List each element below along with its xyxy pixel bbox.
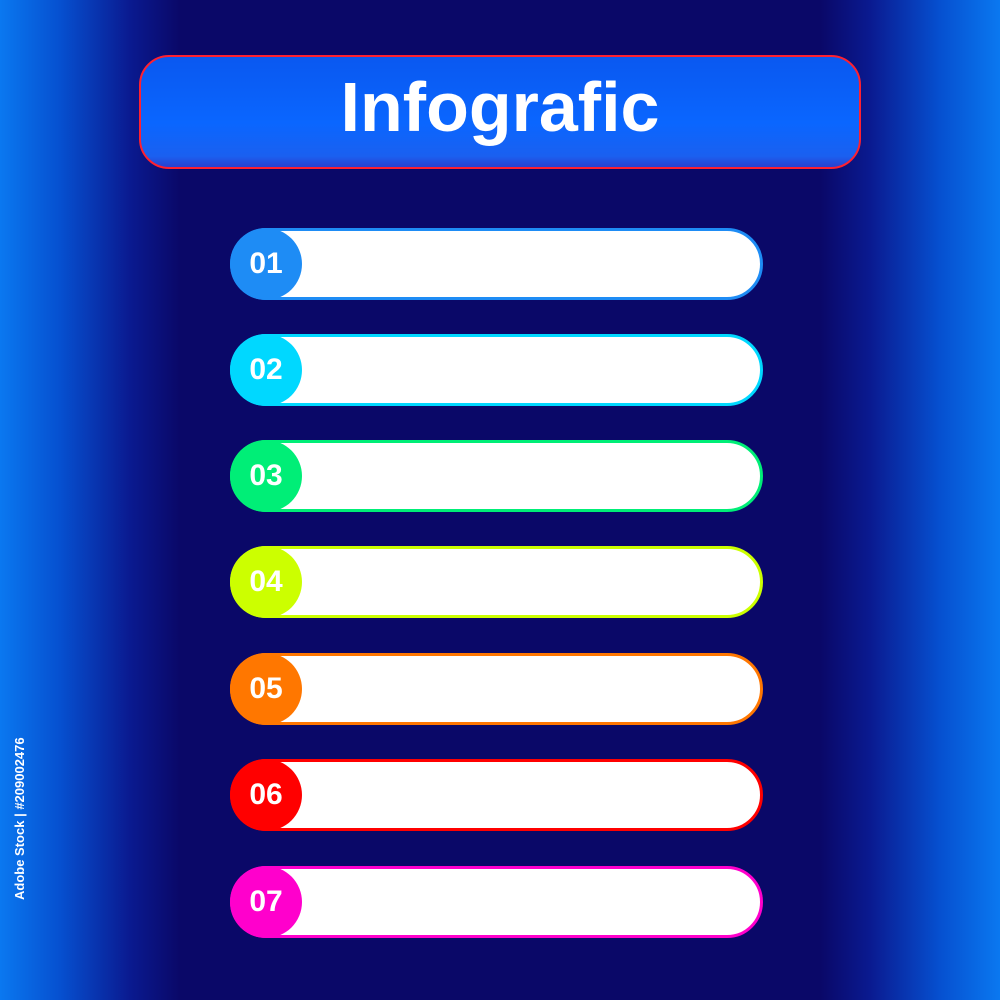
side credit text: Adobe Stock | #209002476	[12, 737, 27, 900]
bar 01	[230, 228, 763, 300]
bar 05	[230, 653, 763, 725]
bar 01: 01	[249, 247, 283, 280]
bar 07: 07	[249, 885, 283, 918]
bar 07	[230, 866, 763, 938]
title	[139, 55, 861, 169]
bar 03: 03	[249, 459, 283, 492]
bar 06	[230, 759, 763, 831]
bar 03	[230, 440, 763, 512]
title: Infografic	[341, 68, 659, 146]
bar 05: 05	[249, 672, 283, 705]
bar 02: 02	[249, 353, 283, 386]
bar 04	[230, 546, 763, 618]
bar 04: 04	[249, 565, 283, 598]
bar 06: 06	[249, 778, 283, 811]
bar 02	[230, 334, 763, 406]
